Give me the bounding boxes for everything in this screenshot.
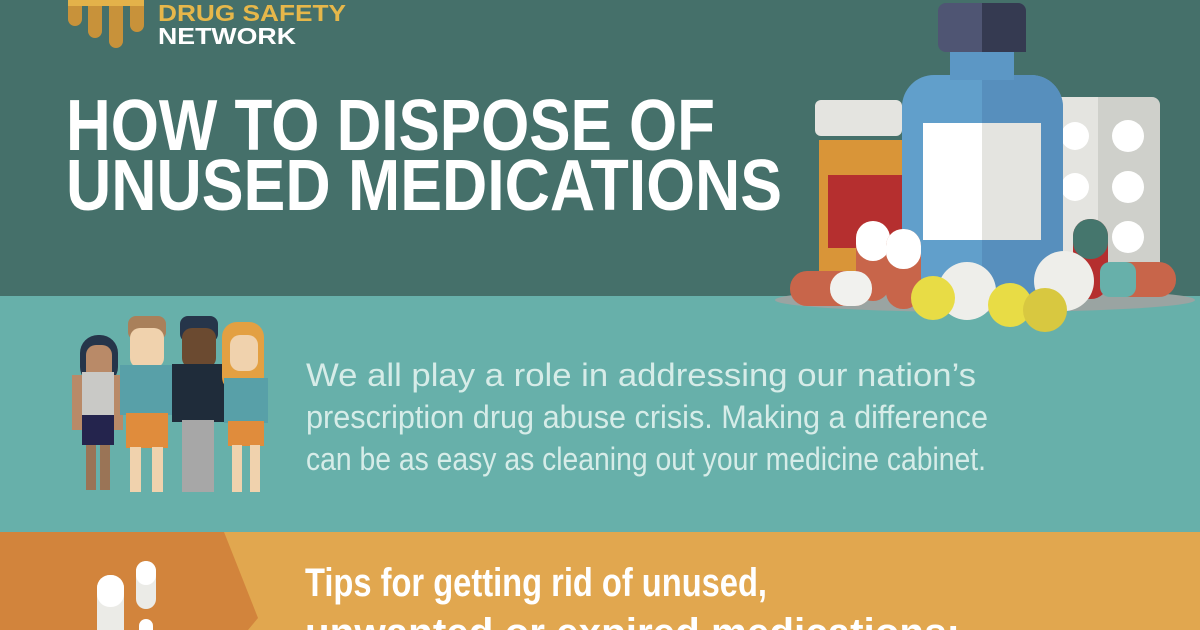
intro paragraph [306, 357, 988, 477]
logo: NETWORK [158, 23, 296, 49]
title: HOW TO DISPOSE OF [66, 86, 715, 166]
intro paragraph: can be as easy as cleaning out your medicine cabinet. [306, 441, 986, 477]
tips heading: Tips for getting rid of unused, [305, 561, 767, 605]
illustration: medications [775, 3, 1195, 332]
intro paragraph: We all play a role in addressing our nation’s [306, 357, 976, 393]
tips heading [305, 561, 960, 630]
tips band [0, 532, 1200, 630]
title [66, 86, 782, 226]
logo: DRUG SAFETY [158, 0, 346, 26]
illustration: people [72, 316, 268, 492]
intro paragraph: prescription drug abuse crisis. Making a difference [306, 399, 988, 435]
logo [68, 0, 346, 49]
header background [0, 0, 1200, 296]
intro band background [0, 296, 1200, 532]
icon: pills [97, 561, 156, 630]
title: UNUSED MEDICATIONS [66, 146, 782, 226]
